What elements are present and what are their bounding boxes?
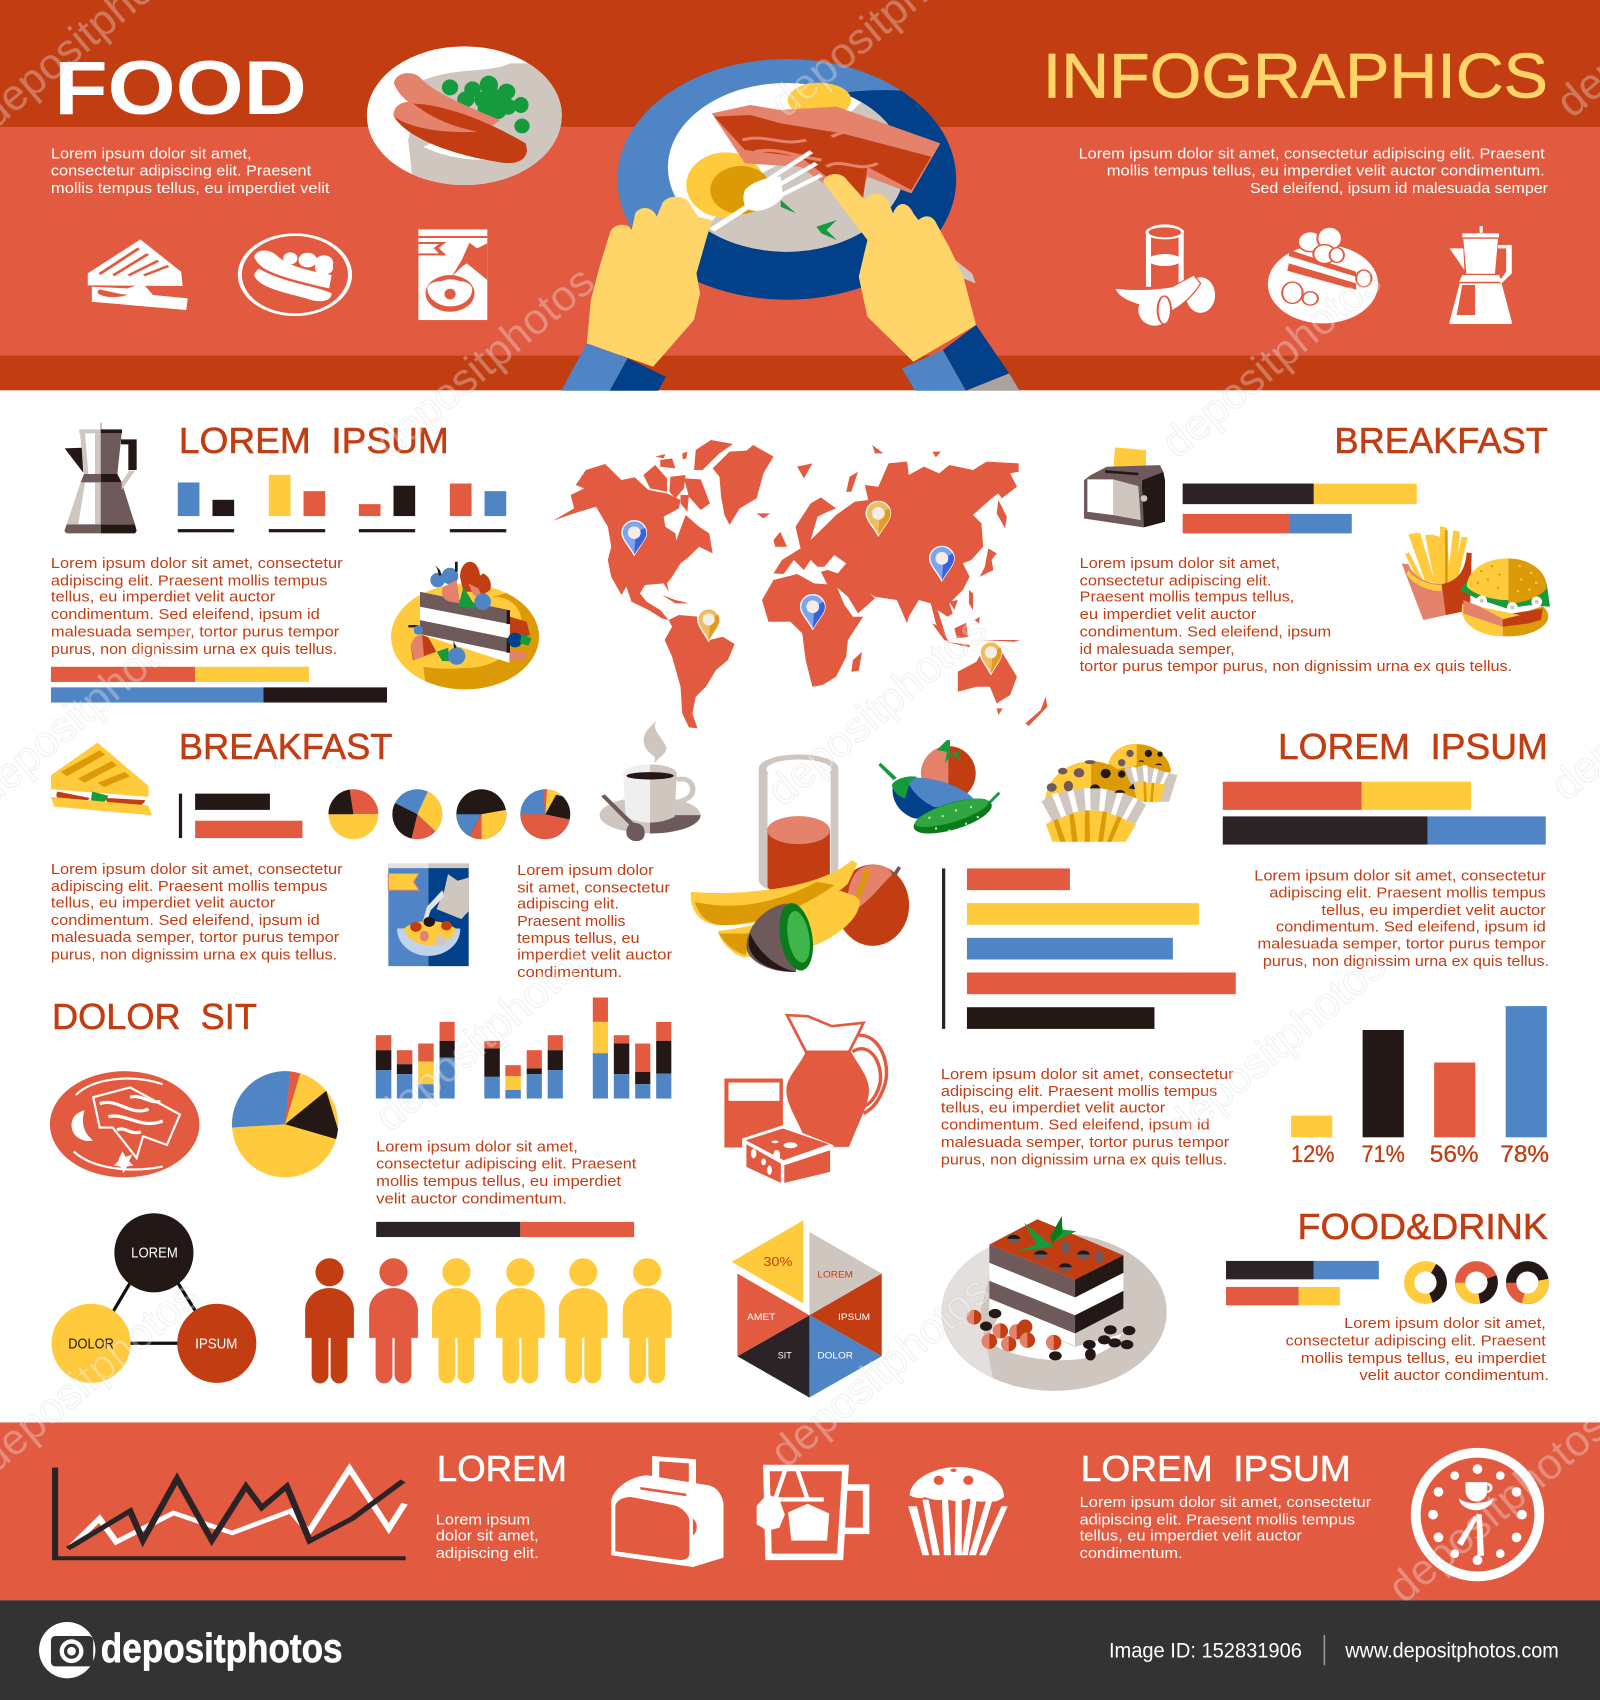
icon: toaster colour: [1084, 447, 1165, 527]
illustration: sandwich colour: [51, 743, 152, 815]
text block: lorem ipsum right: malesuada semper, tortor purus tempor: [1257, 936, 1546, 953]
bottom band: [0, 1422, 1600, 1600]
text: depositphotos: [1153, 257, 1390, 467]
progress bar: people: [376, 1222, 634, 1237]
text block: lorem ipsum: condimentum. Sed eleifend, ipsum id: [51, 606, 320, 623]
icon: jug glass and cheese: [724, 1015, 887, 1187]
text block: lorem ipsum: adipiscing elit. Praesent mollis tempus: [51, 572, 328, 589]
website: www.depositphotos.com: [1344, 1640, 1559, 1663]
icon: tea mug white: [757, 1468, 866, 1557]
text block: food and drink: [1286, 1315, 1549, 1384]
icon: sandwich white: [88, 239, 188, 310]
text block: breakfast left: malesuada semper, tortor purus tempor: [51, 929, 339, 946]
person dark red: [305, 1258, 354, 1383]
percent bar chart: 71%: [1362, 1141, 1405, 1168]
text: depositphotos: [758, 605, 996, 815]
left hand: [561, 197, 712, 391]
world map: [553, 440, 1047, 728]
text block: lorem ipsum right: tellus, eu imperdiet velit auctor: [1321, 902, 1546, 919]
text block: breakfast right: tortor purus tempor purus, non dignissim urna ex quis tellus.: [1080, 658, 1512, 675]
illustration: plate with hands: [561, 59, 1019, 391]
map pin orange: australia: [980, 642, 1002, 674]
icon: coffee pot white: [1450, 226, 1512, 324]
icon: toaster white: [611, 1459, 724, 1567]
text block: food and drink: Lorem ipsum dolor sit amet,: [1344, 1315, 1546, 1332]
pie chart: dolor sit: [231, 1070, 341, 1179]
text block: food and drink: velit auctor condimentum.: [1359, 1367, 1549, 1384]
illustration: cereal box: [388, 863, 469, 966]
map pin blue: north america: [622, 521, 646, 555]
illustration: fries and burger: [1402, 526, 1550, 636]
progress bars: [51, 667, 387, 703]
text block: lorem ipsum right: purus, non dignissim urna ex quis tellus.: [1263, 953, 1549, 970]
illustration: coffee cup: [600, 720, 701, 841]
text block: cereal: Lorem ipsum dolor: [517, 862, 654, 879]
percent bar chart: 56%: [1430, 1141, 1479, 1168]
percent bar chart: [1291, 1006, 1549, 1168]
text block: percent bars: condimentum. Sed eleifend, ipsum id: [941, 1117, 1210, 1134]
text block: percent bars: adipiscing elit. Praesent mollis tempus: [941, 1083, 1218, 1100]
pie 1: [328, 789, 378, 840]
text block: breakfast right: Praesent mollis tempus tellus,: [1080, 589, 1294, 606]
text block: cereal: imperdiet velit auctor: [517, 947, 672, 964]
text block: lorem ipsum right: [1254, 867, 1549, 970]
header text left: mollis tempus tellus, eu imperdiet velit: [51, 180, 330, 197]
text: depositphotos: [1157, 941, 1395, 1151]
hexagon chart: SIT: [778, 1351, 792, 1361]
header text left: [51, 145, 330, 197]
text block: cereal: sit amet, consectetur: [517, 879, 670, 896]
bacon: [712, 105, 940, 207]
text block: lorem ipsum: [51, 555, 343, 658]
node diagram: IPSUM: [195, 1336, 237, 1353]
percent bar chart: 78%: [1500, 1141, 1549, 1168]
hexagon chart: DOLOR: [817, 1351, 853, 1361]
map pin blue: china: [930, 546, 954, 581]
heading: lorem ipsum: LOREM IPSUM: [179, 421, 449, 461]
text block: lorem ipsum bottom: tellus, eu imperdiet velit auctor: [1080, 1528, 1302, 1545]
illustration: layered cake: [940, 1216, 1167, 1391]
icon: hot dog plate white: [240, 235, 350, 315]
fork and knife: [712, 152, 976, 283]
person yellow 1: [432, 1258, 481, 1383]
heading: breakfast left: BREAKFAST: [179, 727, 393, 767]
americas and greenland: [553, 440, 774, 728]
horizontal bar chart: [942, 868, 1236, 1029]
header text right: Sed eleifend, ipsum id malesuada semper: [1250, 180, 1548, 197]
text: depositphotos: [761, 1266, 999, 1477]
heading: lorem ipsum bottom: LOREM IPSUM: [1081, 1449, 1351, 1489]
illustration: vegetables: [878, 740, 1000, 841]
image id: Image ID: 152831906: [1109, 1640, 1302, 1663]
text block: percent bars: purus, non dignissim urna ex quis tellus.: [941, 1151, 1227, 1168]
heading: breakfast right: BREAKFAST: [1334, 421, 1548, 461]
stacked bars: food and drink: [1226, 1261, 1379, 1305]
person yellow 4: [623, 1258, 672, 1383]
title: INFOGRAPHICS: INFOGRAPHICS: [1043, 42, 1548, 112]
text block: percent bars: malesuada semper, tortor purus tempor: [941, 1134, 1229, 1151]
bar chart: small grouped bars: [178, 475, 506, 532]
text block: lorem bottom: adipiscing elit.: [436, 1545, 539, 1562]
text block: cereal: condimentum.: [517, 964, 622, 981]
egg yolk: [686, 83, 851, 218]
text block: food and drink: consectetur adipiscing elit. Praesent: [1286, 1332, 1547, 1349]
hexagon chart: AMET: [747, 1312, 776, 1322]
right hand: [823, 174, 1019, 391]
text block: lorem ipsum bottom: condimentum.: [1080, 1545, 1183, 1562]
logo: depositphotos: depositphotos: [101, 1625, 343, 1671]
text block: dolor sit: mollis tempus tellus, eu imperdiet: [376, 1173, 622, 1190]
line chart: [55, 1468, 406, 1558]
text block: breakfast right: [1080, 555, 1512, 675]
stacked bars: lorem ipsum right: [1223, 782, 1546, 845]
text block: lorem ipsum: tellus, eu imperdiet velit auctor: [51, 589, 275, 606]
text block: breakfast right: consectetur adipiscing elit.: [1080, 572, 1272, 589]
heading: dolor sit: DOLOR SIT: [52, 997, 257, 1037]
node diagram: [51, 1213, 256, 1383]
pie 3: [456, 789, 506, 840]
header text left: Lorem ipsum dolor sit amet,: [51, 145, 251, 162]
text block: breakfast left: purus, non dignissim urna ex quis tellus.: [51, 947, 337, 964]
text block: lorem ipsum: Lorem ipsum dolor sit amet, consectetur: [51, 555, 343, 572]
logo: depositphotos: [39, 1622, 343, 1678]
text block: breakfast right: eu imperdiet velit auctor: [1080, 606, 1256, 623]
text block: cereal: [517, 862, 672, 981]
text block: lorem bottom: dolor sit amet,: [436, 1528, 539, 1545]
text block: cereal: adipiscing elit.: [517, 896, 619, 913]
icon: cereal box white: [418, 229, 487, 320]
text block: lorem ipsum bottom: adipiscing elit. Praesent mollis tempus: [1080, 1511, 1355, 1528]
text block: dolor sit: consectetur adipiscing elit. Praesent: [376, 1156, 637, 1173]
text block: lorem bottom: [436, 1511, 539, 1562]
text block: breakfast left: adipiscing elit. Praesent mollis tempus: [51, 878, 328, 895]
person coral: [369, 1258, 418, 1383]
header text left: consectetur adipiscing elit. Praesent: [51, 163, 312, 180]
text block: breakfast left: tellus, eu imperdiet velit auctor: [51, 894, 275, 911]
pie 2: [392, 789, 442, 840]
text block: lorem ipsum right: adipiscing elit. Praesent mollis tempus: [1269, 885, 1546, 902]
text block: lorem ipsum: purus, non dignissim urna ex quis tellus.: [51, 641, 337, 658]
person yellow 3: [559, 1258, 608, 1383]
text: depositphotos: [366, 930, 603, 1141]
icon: muffin white: [908, 1467, 1008, 1555]
icon: juice and fruit white: [1115, 226, 1216, 326]
text block: dolor sit: [376, 1138, 637, 1207]
donut charts: [1403, 1260, 1546, 1305]
stacked bars: breakfast: [1183, 484, 1417, 533]
bar pair: breakfast left: [179, 794, 302, 838]
text block: food and drink: mollis tempus tellus, eu imperdiet: [1301, 1350, 1547, 1367]
text block: lorem ipsum bottom: [1080, 1494, 1371, 1562]
title: FOOD: FOOD: [54, 46, 307, 131]
illustration: sausage plate: [367, 46, 566, 187]
footer bar: [0, 1600, 1600, 1700]
text: depositphotos: [366, 257, 603, 467]
heading: lorem bottom: LOREM: [437, 1449, 567, 1489]
node diagram: DOLOR: [68, 1336, 114, 1353]
illustration: cake on yellow plate: [391, 562, 540, 693]
icon: meat plate: [50, 1071, 199, 1177]
text block: cereal: tempus tellus, eu: [517, 930, 640, 947]
text block: lorem ipsum bottom: Lorem ipsum dolor sit amet, consectetur: [1080, 1494, 1371, 1511]
people pictogram: [305, 1258, 672, 1383]
text block: breakfast right: condimentum. Sed eleifend, ipsum: [1080, 623, 1331, 640]
map pin blue: africa: [801, 595, 825, 629]
heading: food and drink: FOOD&DRINK: [1298, 1207, 1548, 1247]
text block: dolor sit: Lorem ipsum dolor sit amet,: [376, 1138, 578, 1155]
text block: breakfast left: Lorem ipsum dolor sit amet, consectetur: [51, 861, 343, 878]
text block: breakfast left: [51, 861, 343, 964]
icon: clock with coffee: [1416, 1453, 1539, 1576]
text block: percent bars: Lorem ipsum dolor sit amet, consectetur: [941, 1066, 1234, 1083]
map pin orange: russia: [866, 501, 890, 536]
percent bar chart: 12%: [1291, 1141, 1334, 1168]
person yellow 2: [496, 1258, 545, 1383]
header text right: mollis tempus tellus, eu imperdiet velit auctor condimentum.: [1107, 163, 1545, 180]
text block: lorem bottom: Lorem ipsum: [436, 1511, 530, 1528]
text block: lorem ipsum right: condimentum. Sed eleifend, ipsum id: [1276, 918, 1546, 935]
stacked bar chart: [376, 998, 671, 1099]
hexagon chart: 30%: [763, 1254, 793, 1269]
text block: dolor sit: velit auctor condimentum.: [376, 1190, 567, 1207]
header band: [0, 0, 1600, 390]
plate rim: [617, 59, 956, 300]
text block: breakfast left: condimentum. Sed eleifend, ipsum id: [51, 912, 320, 929]
icon: coffee pot colour: [64, 423, 137, 533]
text block: lorem ipsum: malesuada semper, tortor purus tempor: [51, 623, 339, 640]
header text right: [1079, 145, 1548, 197]
text block: lorem ipsum right: Lorem ipsum dolor sit amet, consectetur: [1254, 867, 1546, 884]
text block: percent bars: tellus, eu imperdiet velit auctor: [941, 1099, 1165, 1116]
icon: cake white: [1268, 227, 1378, 323]
map pin orange: south america: [698, 609, 719, 641]
text block: breakfast right: id malesuada semper,: [1080, 641, 1235, 658]
node diagram: LOREM: [131, 1245, 178, 1262]
hexagon chart: [732, 1220, 882, 1398]
text block: breakfast right: Lorem ipsum dolor sit amet,: [1080, 555, 1280, 572]
heading: lorem ipsum right: LOREM IPSUM: [1278, 727, 1548, 767]
eurasia africa oceania: [762, 445, 1047, 726]
illustration: muffins: [1037, 744, 1177, 842]
illustration: juice glass and fruit: [691, 754, 909, 972]
pie 4: [520, 789, 570, 840]
hexagon chart: IPSUM: [838, 1312, 870, 1322]
text block: cereal: Praesent mollis: [517, 913, 626, 930]
text block: percent bars: [941, 1066, 1234, 1168]
header text right: Lorem ipsum dolor sit amet, consectetur adipiscing elit. Praesent: [1079, 145, 1546, 162]
hexagon chart: LOREM: [817, 1270, 853, 1280]
